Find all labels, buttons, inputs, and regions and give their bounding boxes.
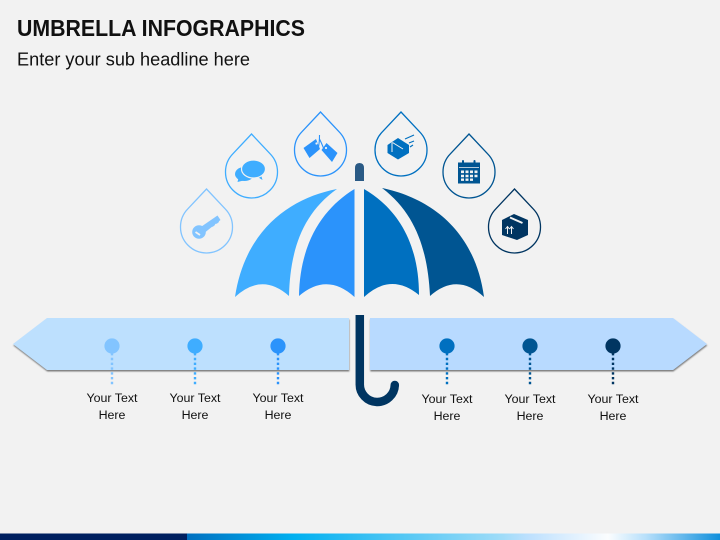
timeline point 1: Here [99,408,126,422]
timeline point 5: Here [517,409,544,423]
umbrella tip [355,163,364,181]
timeline point 1: Your Text [87,391,138,405]
timeline point 4 [422,338,473,423]
title: UMBRELLA INFOGRAPHICS [17,15,305,41]
drop icon: package box [488,189,540,253]
drop icon: delivery box [375,112,427,176]
timeline point 6: Here [600,409,627,423]
timeline point 4: Here [434,409,461,423]
left arrow banner [13,318,349,370]
timeline point 3: Your Text [253,391,304,405]
timeline point 2 [170,338,221,422]
right arrow banner [370,318,707,370]
canopy panel 1 [235,189,337,297]
umbrella handle [360,315,399,402]
timeline point 5 [505,338,556,423]
drop icon: chat bubbles [226,134,278,198]
timeline point 5: Your Text [505,392,556,406]
timeline point 2: Your Text [170,391,221,405]
timeline point 4: Your Text [422,392,473,406]
timeline point 6: Your Text [588,392,639,406]
timeline point 3: Here [265,408,292,422]
umbrella [235,163,484,402]
drop icon: price tags [294,112,346,176]
canopy panel 4 [382,188,484,297]
timeline point 1 [87,338,138,422]
timeline point 2: Here [182,408,209,422]
canopy panel 3 [364,189,419,297]
timeline point 3 [253,338,304,422]
drop icon: key [180,189,232,253]
canopy panel 2 [299,189,354,297]
subtitle: Enter your sub headline here [17,50,250,70]
timeline point 6 [588,338,639,423]
footer bar [0,534,720,540]
drop icon: calendar [443,134,495,198]
